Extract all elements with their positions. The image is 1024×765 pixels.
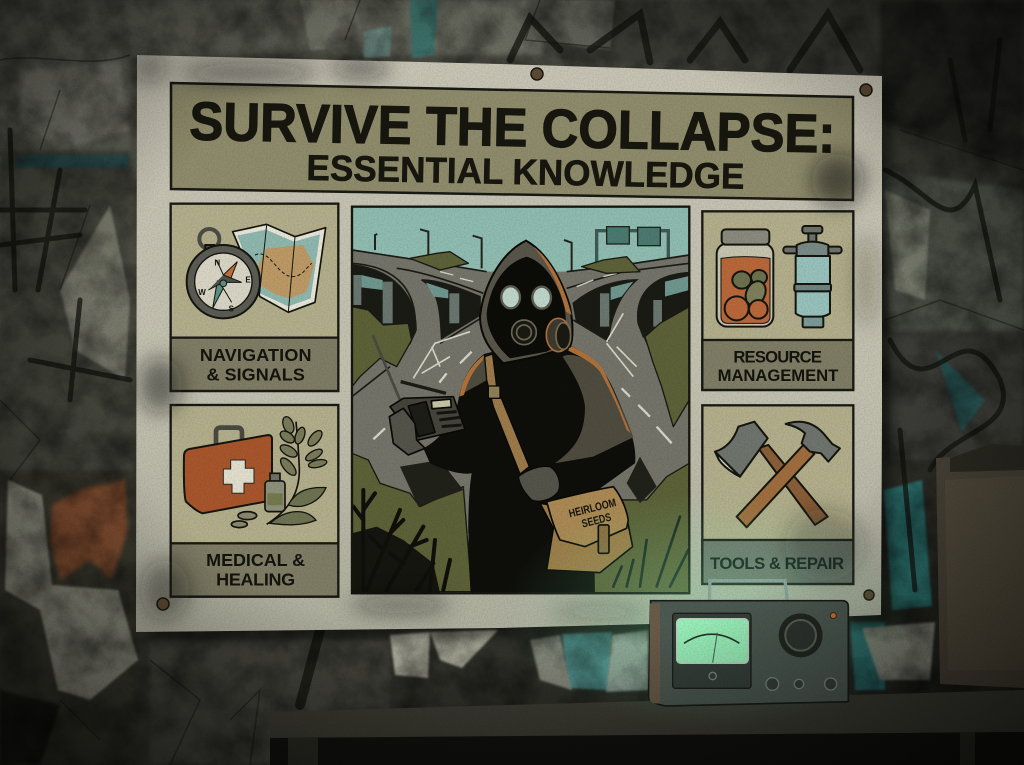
poster paper <box>136 55 882 632</box>
clipboard on wall, right <box>936 444 1024 688</box>
distant lamps and gantry <box>375 227 668 272</box>
road collapse shadows <box>400 460 463 507</box>
poster shadow <box>145 62 892 642</box>
icon: preserving jar <box>717 229 773 327</box>
road surface <box>352 250 689 533</box>
icon: hammer <box>737 422 840 527</box>
label: medical and healing: MEDICAL & <box>206 550 305 570</box>
jacket body <box>423 343 635 593</box>
icon: compass: S <box>229 305 235 314</box>
analog signal meter device <box>649 581 848 706</box>
gas mask filter <box>512 318 571 352</box>
poster grime <box>134 54 878 620</box>
road markings <box>373 272 672 443</box>
radio glow on wall and poster <box>500 490 920 730</box>
foreground foliage <box>352 490 688 593</box>
title line 2: ESSENTIAL KNOWLEDGE <box>306 147 745 197</box>
label: navigation and signals: NAVIGATION <box>200 345 311 365</box>
label: navigation and signals <box>200 345 311 384</box>
indicator lamp <box>830 613 836 619</box>
hood <box>480 241 572 363</box>
poster pins <box>157 68 874 610</box>
icon: healing herb <box>267 415 328 525</box>
lit right sleeve <box>555 355 633 463</box>
seed bag <box>540 487 633 573</box>
label: resource management <box>718 347 838 385</box>
label: medical and healing: HEALING <box>216 570 295 590</box>
panel: medical and healing <box>171 405 338 597</box>
label: medical and healing <box>206 550 305 590</box>
small knobs <box>709 672 837 690</box>
tuning knob <box>779 613 823 657</box>
icon: first aid kit <box>184 428 272 513</box>
title line 1: SURVIVE THE COLLAPSE: <box>189 92 836 164</box>
label: navigation and signals: & SIGNALS <box>206 364 305 384</box>
orange rim light right <box>568 345 631 433</box>
right hand <box>518 466 560 501</box>
seed bag: HEIRLOOM <box>568 497 617 520</box>
panel: central illustration <box>352 207 689 593</box>
icon: axe <box>715 422 828 525</box>
device case <box>649 601 848 706</box>
carrying handle <box>709 581 787 600</box>
lit left shoulder <box>459 355 487 397</box>
label: resource management: MANAGEMENT <box>718 366 838 385</box>
icon: water filter <box>783 226 842 327</box>
meter face <box>673 613 751 688</box>
dark underpass left inner <box>422 280 480 338</box>
hooded figure <box>373 241 635 593</box>
label: resource management: RESOURCE <box>733 347 822 366</box>
handheld radio <box>373 335 465 455</box>
icon: compass: W <box>198 288 206 297</box>
dark shelf <box>270 690 1024 765</box>
icon: compass: E <box>245 275 251 284</box>
bridge pillars and sky slivers <box>353 275 689 327</box>
shoulder strap <box>485 354 529 474</box>
dark underpass right <box>638 273 689 337</box>
poster <box>134 54 892 642</box>
ramp edges <box>352 250 689 397</box>
label: tools and repair: TOOLS & REPAIR <box>710 554 844 573</box>
dark underpass right inner <box>573 280 637 340</box>
icon: medicine bottle <box>231 473 285 528</box>
gas mask eyes <box>501 286 551 309</box>
dark underpass left <box>352 265 416 343</box>
title banner <box>171 83 853 200</box>
panel: tools and repair <box>702 405 853 584</box>
seed bag: SEEDS <box>581 512 613 531</box>
icon: folded map <box>233 224 326 312</box>
icon: compass: N <box>214 259 220 268</box>
panel: navigation and signals <box>171 204 338 391</box>
roadside vegetation <box>352 252 689 593</box>
orange paint patch <box>50 480 128 580</box>
panel: resource management <box>702 211 853 390</box>
icon: compass <box>187 229 260 318</box>
